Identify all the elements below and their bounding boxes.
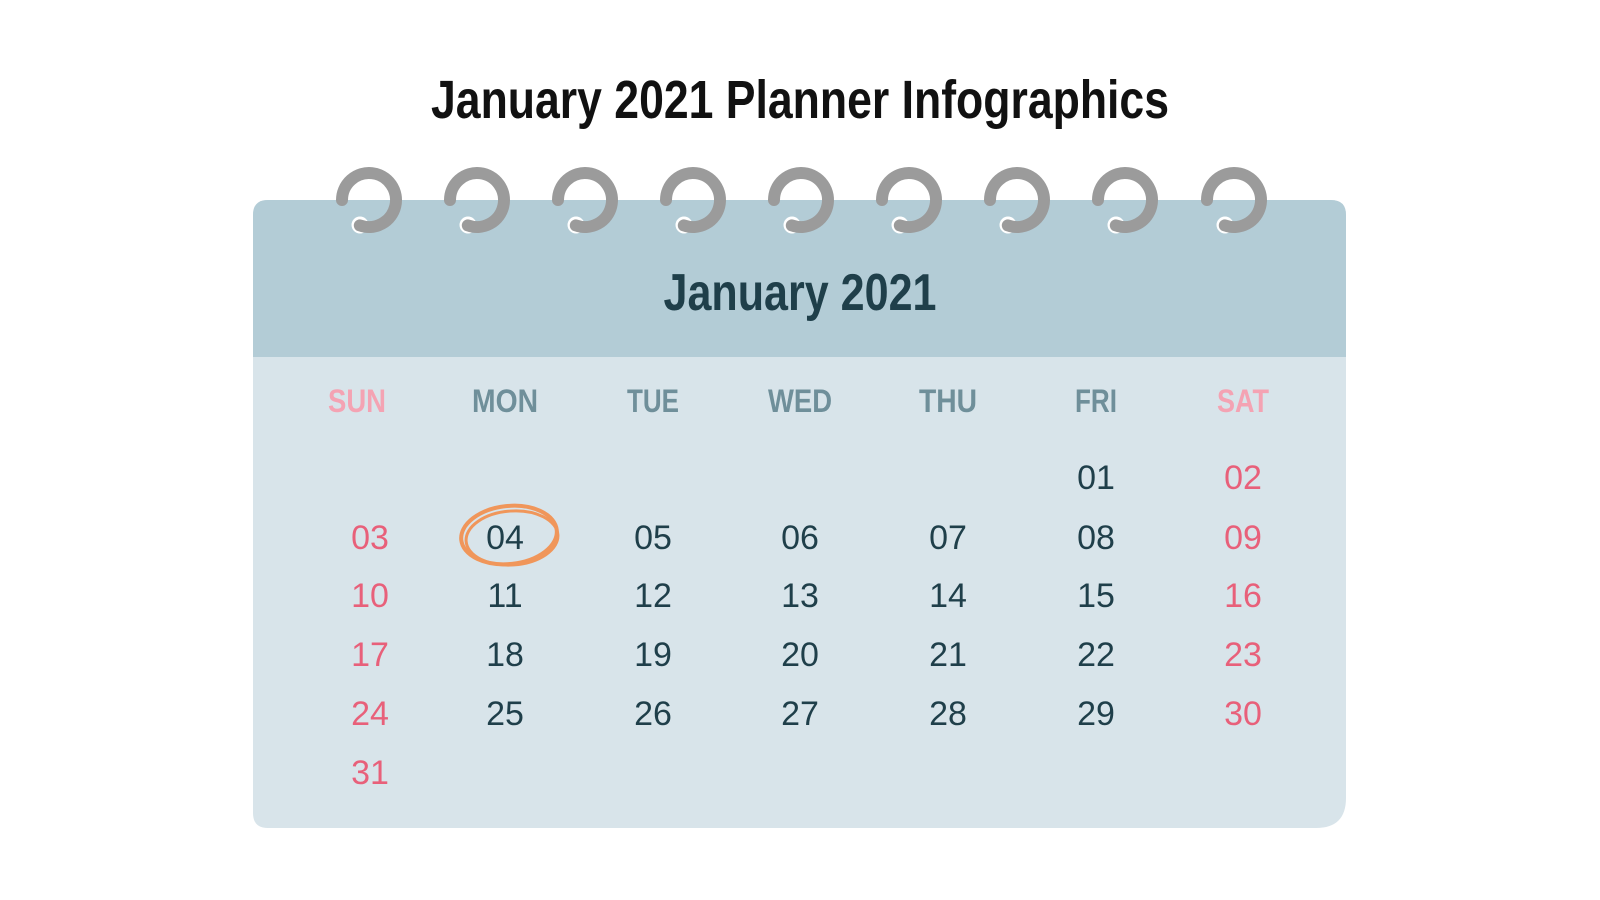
date numbers: 13 [781, 577, 819, 615]
binder rings [342, 173, 1261, 234]
date numbers: 07 [929, 519, 967, 557]
weekday labels: THU [919, 383, 977, 419]
date numbers: 03 [351, 519, 389, 557]
date numbers: 08 [1077, 519, 1115, 557]
date numbers: 10 [351, 577, 389, 615]
date numbers: 22 [1077, 636, 1115, 674]
date numbers: 04 [486, 519, 524, 557]
date numbers: 02 [1224, 459, 1262, 497]
date numbers: 26 [634, 695, 672, 733]
header month text: January 2021 [664, 264, 936, 322]
date numbers: 24 [351, 695, 389, 733]
date numbers: 23 [1224, 636, 1262, 674]
date numbers: 19 [634, 636, 672, 674]
date numbers [351, 459, 1262, 792]
date numbers: 16 [1224, 577, 1262, 615]
date numbers: 18 [486, 636, 524, 674]
weekday labels: TUE [627, 383, 679, 419]
date numbers: 15 [1077, 577, 1115, 615]
highlight circle around 04 [458, 501, 560, 569]
panel: calendar [253, 200, 1346, 828]
date numbers: 01 [1077, 459, 1115, 497]
date numbers: 14 [929, 577, 967, 615]
date numbers: 20 [781, 636, 819, 674]
date numbers: 12 [634, 577, 672, 615]
weekday labels: SUN [328, 383, 386, 419]
weekday labels: FRI [1075, 383, 1117, 419]
date numbers: 27 [781, 695, 819, 733]
date numbers: 29 [1077, 695, 1115, 733]
date numbers: 31 [351, 754, 389, 792]
date numbers: 05 [634, 519, 672, 557]
calendar header band [253, 200, 1346, 357]
title: January 2021 Planner Infographics [431, 70, 1169, 130]
weekday labels: WED [768, 383, 832, 419]
date numbers: 25 [486, 695, 524, 733]
date numbers: 06 [781, 519, 819, 557]
date numbers: 09 [1224, 519, 1262, 557]
date numbers: 11 [487, 577, 523, 615]
date numbers: 21 [929, 636, 967, 674]
weekday labels: MON [472, 383, 538, 419]
date numbers: 30 [1224, 695, 1262, 733]
weekday labels [328, 383, 1269, 419]
date numbers: 28 [929, 695, 967, 733]
weekday labels: SAT [1217, 383, 1269, 419]
date numbers: 17 [351, 636, 389, 674]
